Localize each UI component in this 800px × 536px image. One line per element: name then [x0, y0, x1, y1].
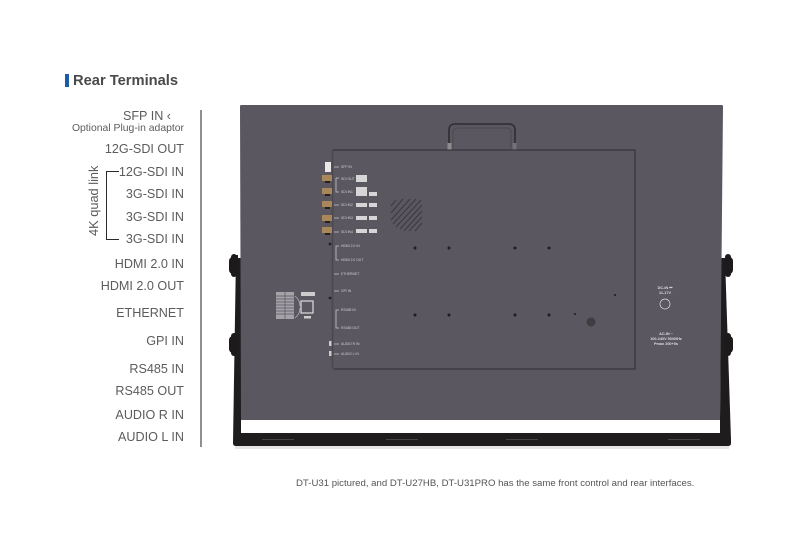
DC and AC power markings: AC-IN ~: [659, 332, 674, 336]
terminal labels: HDMI 2.0 OUT: [101, 279, 184, 293]
terminal labels: [72, 109, 184, 444]
terminal labels: AUDIO R IN: [115, 408, 184, 422]
terminal labels: SFP IN ‹: [123, 109, 171, 123]
terminal labels: Optional Plug-in adaptor: [72, 123, 184, 134]
handle: [448, 124, 516, 150]
terminal labels: 12G-SDI OUT: [105, 142, 184, 156]
panel micro labels: SFP IN: [341, 165, 352, 169]
panel micro labels: SDI IN1: [341, 190, 353, 194]
terminal labels: 12G-SDI IN: [119, 165, 184, 179]
panel micro labels: ETHERNET: [341, 272, 359, 276]
monitor body: [240, 105, 723, 420]
panel micro labels: SDI IN2: [341, 203, 353, 207]
panel micro labels: AUDIO L IN: [341, 352, 359, 356]
terminal labels: 3G-SDI IN: [126, 210, 184, 224]
divider line: [200, 110, 202, 447]
terminal labels: 3G-SDI IN: [126, 187, 184, 201]
title: Rear Terminals: [73, 73, 178, 89]
DC and AC power markings: [650, 286, 682, 346]
panel micro labels: AUDIO R IN: [341, 342, 360, 346]
terminal labels: AUDIO L IN: [118, 430, 184, 444]
connectors: [322, 162, 332, 356]
GPI pin table: [276, 292, 315, 319]
panel micro labels: SDI IN3: [341, 216, 353, 220]
terminal labels: GPI IN: [146, 334, 184, 348]
terminal labels: HDMI 2.0 IN: [115, 257, 184, 271]
left knobs: [229, 254, 238, 356]
panel micro labels: [341, 165, 363, 356]
terminal labels: ETHERNET: [116, 306, 184, 320]
right knobs: [724, 254, 733, 356]
screw holes: [414, 246, 616, 326]
4K quad link bracket: 4K quad link: [86, 166, 101, 236]
terminal labels: RS485 OUT: [115, 384, 184, 398]
panel micro labels: GPI IN: [341, 289, 352, 293]
panel micro labels: SDI IN4: [341, 230, 353, 234]
vent grille: [391, 199, 422, 231]
DC and AC power markings: Pmax 200+5s: [654, 342, 678, 346]
terminal labels: RS485 IN: [129, 362, 184, 376]
terminal labels: 3G-SDI IN: [126, 232, 184, 246]
stand frame: [233, 255, 731, 449]
caption: DT-U31 pictured, and DT-U27HB, DT-U31PRO has the same front control and rear interfaces.: [296, 478, 694, 489]
panel micro labels: HDMI 2.0 OUT: [341, 258, 363, 262]
DC and AC power markings: DC-IN ⎓: [658, 286, 673, 290]
panel micro labels: HDMI 2.0 IN: [341, 244, 360, 248]
DC and AC power markings: 100-240V 50/60Hz: [650, 337, 682, 341]
inner panel outline: [332, 150, 635, 369]
DC and AC power markings: 11-17V: [659, 291, 671, 295]
panel micro labels: SDI OUT: [341, 177, 355, 181]
4K quad link bracket: [86, 166, 119, 240]
panel micro labels: RS485 IN: [341, 308, 356, 312]
panel micro labels: RS485 OUT: [341, 326, 359, 330]
panel leader lines and icons: [334, 167, 339, 354]
